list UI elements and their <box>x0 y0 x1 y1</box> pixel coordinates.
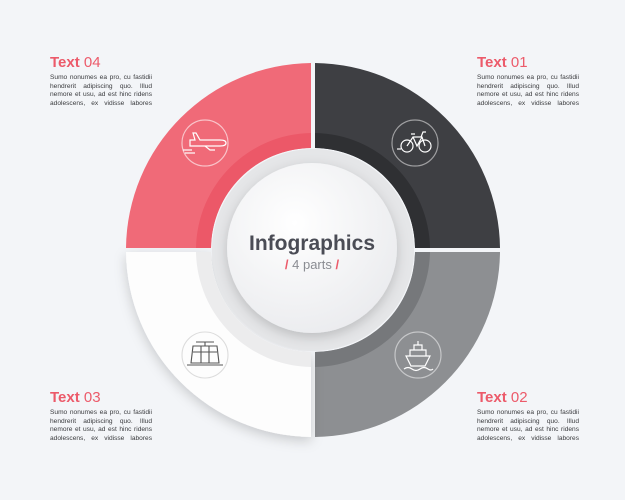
subtitle: / 4 parts / <box>285 257 339 272</box>
icon: airplane <box>182 120 228 166</box>
text block 03: Text 03 <box>50 389 101 406</box>
quadrant: text 02 grey <box>315 252 500 437</box>
inner darker band <box>196 133 430 367</box>
text block 01 <box>477 54 579 107</box>
quadrant: text 04 pink <box>126 63 311 248</box>
center circle <box>227 163 397 333</box>
grey ring <box>212 149 414 351</box>
icon: bicycle <box>392 120 438 166</box>
text block 03 <box>50 389 152 442</box>
text block 04: Text 04 <box>50 54 101 71</box>
text block 04 <box>50 54 152 107</box>
quadrant: text 03 white <box>126 252 311 437</box>
text block 01: Sumo nonumes ea pro, cu fastidii hendrerit adipiscing quo. Illud nemore et usu, ad est hinc ridens adolescens, ex vidisse labores <box>477 74 579 107</box>
text block 04: Sumo nonumes ea pro, cu fastidii hendrerit adipiscing quo. Illud nemore et usu, ad est hinc ridens adolescens, ex vidisse labores <box>50 74 152 107</box>
icon: train <box>182 332 228 378</box>
title: Infographics <box>249 232 375 255</box>
text block 02: Text 02 <box>477 389 528 406</box>
text block 02 <box>477 389 579 442</box>
text block 01: Text 01 <box>477 54 528 71</box>
text block 03: Sumo nonumes ea pro, cu fastidii hendrerit adipiscing quo. Illud nemore et usu, ad est hinc ridens adolescens, ex vidisse labores <box>50 409 152 442</box>
icon: ship <box>395 332 441 378</box>
quadrant: text 01 dark <box>315 63 500 248</box>
text block 02: Sumo nonumes ea pro, cu fastidii hendrerit adipiscing quo. Illud nemore et usu, ad est hinc ridens adolescens, ex vidisse labores <box>477 409 579 442</box>
